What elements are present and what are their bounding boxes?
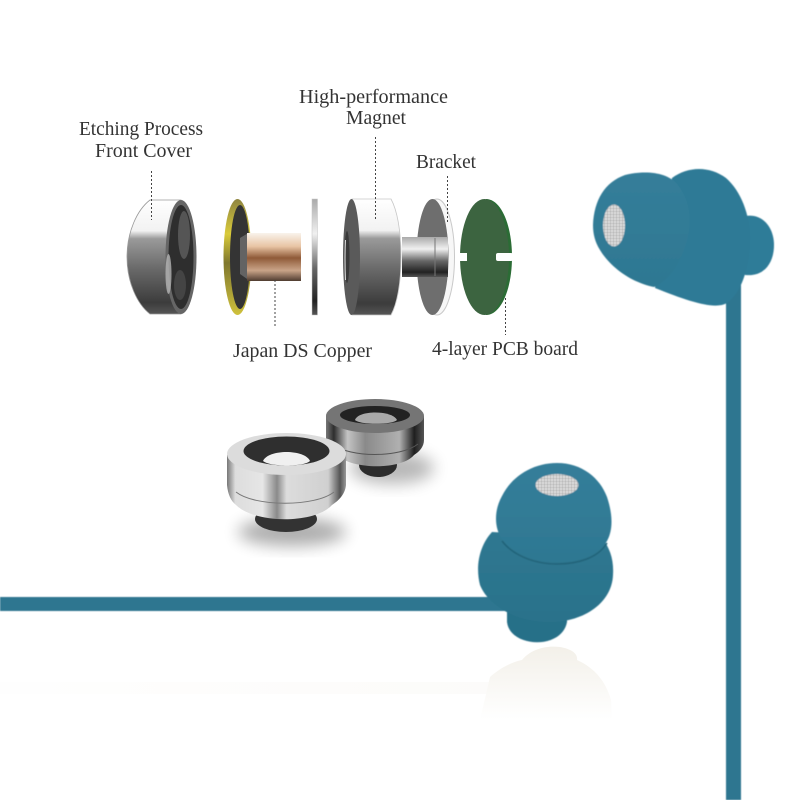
label: high-performance magnet: Magnet — [346, 107, 406, 129]
mesh tip — [603, 204, 625, 246]
label: high-performance magnet — [299, 86, 448, 129]
lower earbud — [0, 463, 613, 642]
label: Japan DS copper: Japan DS Copper — [233, 340, 372, 362]
stem — [745, 216, 774, 275]
label: etching process front cover — [79, 118, 203, 162]
rear lobe — [478, 532, 613, 622]
driver: rear dark unit — [326, 399, 434, 484]
label: bracket: Bracket — [416, 151, 476, 173]
front lobe — [593, 172, 690, 287]
vertical cable — [726, 285, 741, 800]
label: etching process front cover: Front Cover — [95, 140, 192, 162]
part: magnet — [343, 199, 401, 315]
label: etching process front cover: Etching Process — [79, 118, 203, 140]
mesh tip — [536, 474, 578, 496]
driver: front silver unit — [227, 433, 346, 546]
part: PCB board — [458, 199, 513, 315]
rear lobe — [655, 169, 750, 306]
stem — [507, 605, 567, 642]
reflection under earbud — [0, 647, 612, 720]
part: copper coil diaphragm — [224, 199, 301, 315]
label: 4-layer PCB board: 4-layer PCB board — [432, 338, 578, 360]
leader lines — [152, 137, 506, 335]
lobe seam shadow — [502, 541, 607, 564]
part: front cover — [127, 200, 196, 314]
part: bracket — [402, 199, 454, 315]
front lobe — [496, 463, 612, 562]
horizontal cable — [0, 597, 505, 611]
part: thin plate — [312, 199, 318, 315]
label: high-performance magnet: High-performance — [299, 86, 448, 108]
right earbud — [593, 169, 774, 800]
